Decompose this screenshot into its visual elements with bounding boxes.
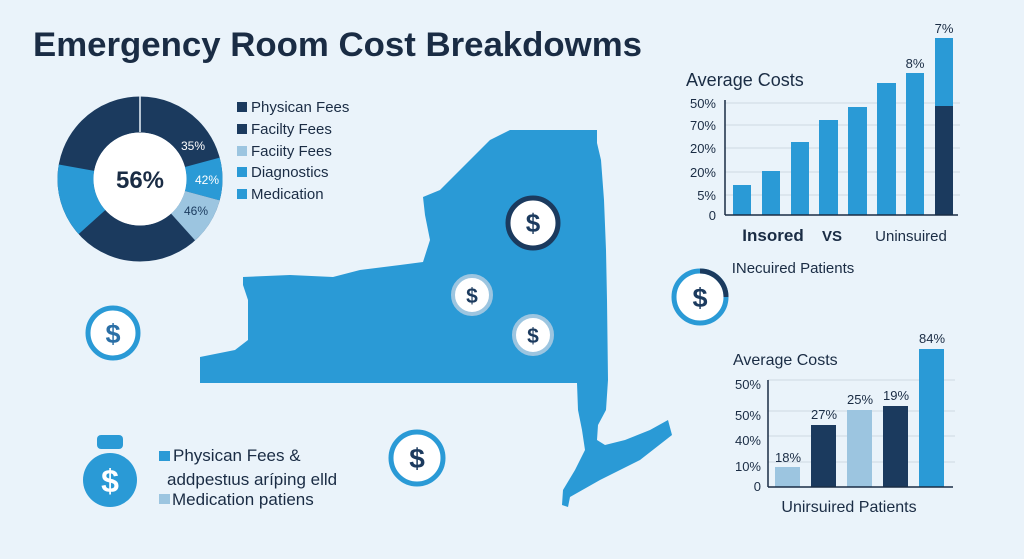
bar chart: insured vs uninsured: [686, 21, 960, 277]
icon: dollar left: [88, 308, 138, 358]
bottom legend: Medication patiens: [172, 490, 314, 509]
bar chart: insured vs uninsured: 8%: [906, 56, 925, 71]
bar chart: uninsured patients: 0: [754, 479, 761, 494]
donut chart: 42%: [195, 173, 219, 187]
donut legend: Faciity Fees: [251, 143, 332, 160]
bar chart: insured vs uninsured: 7%: [935, 21, 954, 36]
bar chart: uninsured patients: 50%: [735, 408, 761, 423]
donut legend: Physican Fees: [251, 99, 349, 116]
bar chart: insured vs uninsured: 20%: [690, 141, 716, 156]
bar chart: uninsured patients: 19%: [883, 388, 909, 403]
bar chart: uninsured patients: 10%: [735, 459, 761, 474]
bar chart: uninsured patients: 27%: [811, 407, 837, 422]
bar chart: uninsured patients: [733, 331, 955, 516]
bottom legend: [159, 446, 337, 509]
bar chart: insured vs uninsured: Uninsuired: [875, 228, 947, 245]
bar chart: insured vs uninsured: 5%: [697, 188, 716, 203]
icon: dollar on map north: [508, 198, 558, 248]
icon: money bag: [83, 435, 137, 507]
bar chart: insured vs uninsured: 20%: [690, 165, 716, 180]
bar chart: uninsured patients: 84%: [919, 331, 945, 346]
bar chart: uninsured patients: 18%: [775, 450, 801, 465]
bar chart: insured vs uninsured: 0: [709, 208, 716, 223]
icon: dollar on map center: $: [466, 285, 478, 308]
donut chart: 35%: [181, 139, 205, 153]
icon: dollar on map south: $: [527, 325, 539, 348]
bar chart: uninsured patients: Average Costs: [733, 352, 838, 369]
bar chart: uninsured patients: 50%: [735, 377, 761, 392]
bar chart: insured vs uninsured: VS: [822, 228, 842, 245]
icon: dollar right: $: [692, 283, 708, 313]
donut legend: Medication: [251, 186, 324, 203]
bar chart: uninsured patients: 25%: [847, 392, 873, 407]
bar chart: insured vs uninsured: Average Costs: [686, 70, 804, 90]
map: New York state: [200, 130, 672, 507]
bar chart: insured vs uninsured: INecuired Patients: [732, 260, 854, 277]
icon: dollar on map north: $: [526, 208, 541, 238]
bar chart: uninsured patients: 40%: [735, 433, 761, 448]
donut legend: Diagnostics: [251, 164, 329, 181]
icon: dollar bottom center: [391, 432, 443, 484]
donut legend: [237, 99, 349, 203]
bottom legend: Physican Fees &: [173, 446, 301, 465]
bar chart: insured vs uninsured: Insored: [742, 226, 804, 245]
icon: dollar left: $: [105, 319, 121, 349]
icon: money bag: $: [101, 463, 119, 499]
bar chart: insured vs uninsured: 50%: [690, 96, 716, 111]
icon: dollar bottom center: $: [409, 443, 425, 474]
bottom legend: addpestιus aríping elld: [167, 470, 337, 489]
donut chart: 46%: [184, 204, 208, 218]
donut legend: Facilty Fees: [251, 121, 332, 138]
donut chart: [76, 96, 219, 244]
icon: dollar on map center: [453, 276, 491, 314]
icon: dollar right: [674, 271, 726, 323]
bar chart: uninsured patients: Unirsuired Patients: [781, 499, 917, 516]
title: Emergency Room Cost Breakdowms: [33, 26, 642, 64]
icon: dollar on map south: [514, 316, 552, 354]
bar chart: insured vs uninsured: 70%: [690, 118, 716, 133]
donut chart: 56%: [116, 167, 164, 194]
